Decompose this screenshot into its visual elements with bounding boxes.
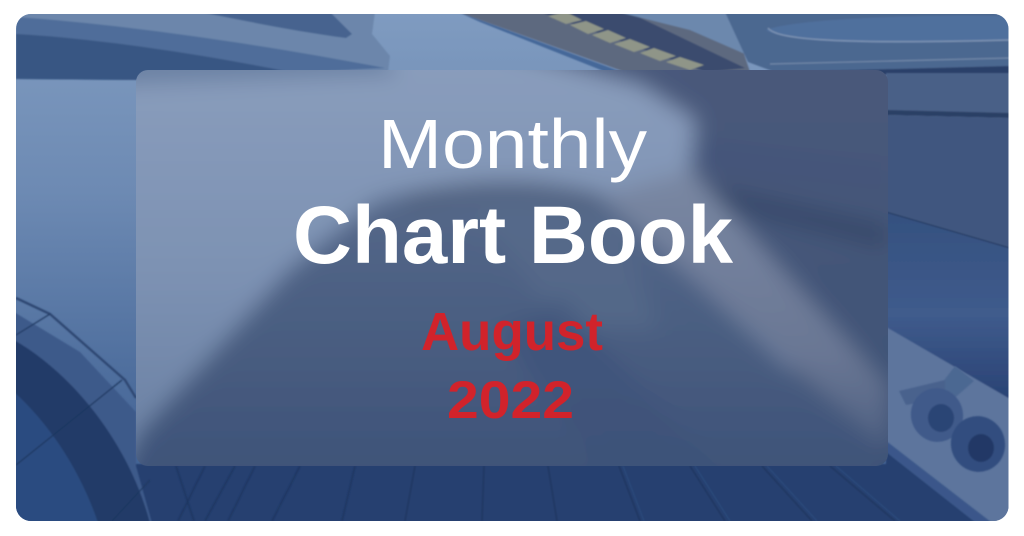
title: Monthly: Monthly <box>378 105 647 183</box>
upper-left overhang <box>16 12 390 80</box>
frosted panel <box>136 70 888 466</box>
date: August: August <box>421 302 603 362</box>
blurred backdrop <box>136 70 888 466</box>
upper-right beam and skylight <box>458 12 1010 75</box>
title: Chart Book: Chart Book <box>293 190 733 281</box>
right wall panels <box>886 73 1011 523</box>
bottom roof panels <box>120 441 992 523</box>
security cameras <box>900 366 1006 472</box>
date: 2022: 2022 <box>447 371 574 430</box>
lower-left curved structure <box>14 298 355 523</box>
